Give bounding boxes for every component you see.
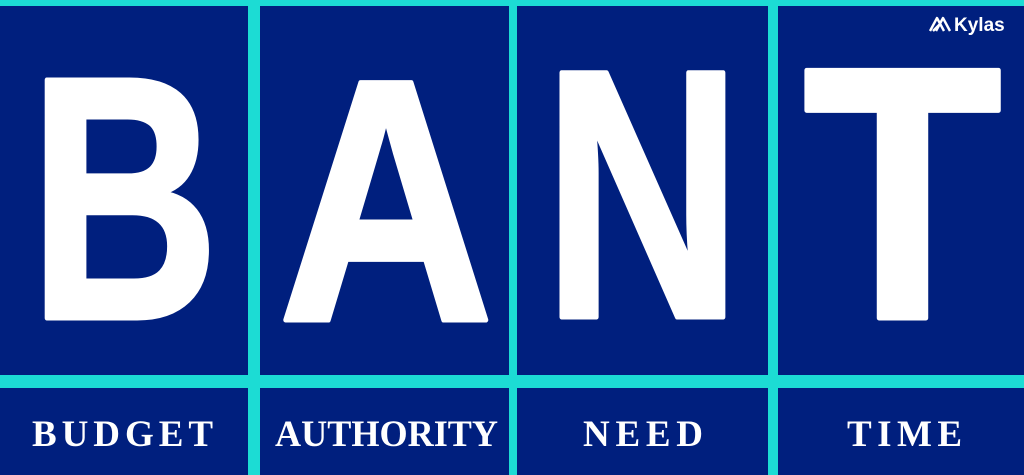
letter A: A: [278, 9, 494, 394]
label: BUDGET: [0, 388, 248, 475]
label: TIME: [778, 388, 1024, 475]
panel: T: [778, 0, 1024, 395]
letter B: B: [29, 6, 219, 392]
label: NEED: [517, 388, 768, 475]
panel: N: [517, 0, 768, 393]
logo: Kylas: Kylas: [954, 15, 1005, 36]
panel: A: [260, 6, 509, 394]
label: AUTHORITY: [260, 388, 509, 475]
label: NEED: NEED: [583, 414, 703, 455]
logo: Kylas: [930, 15, 1005, 36]
label: TIME: TIME: [847, 414, 962, 455]
label: AUTHORITY: AUTHORITY: [275, 414, 498, 455]
letter N: N: [543, 0, 742, 393]
letter T: T: [803, 0, 1002, 395]
panel: B: [0, 6, 248, 392]
label: BUDGET: BUDGET: [32, 414, 213, 455]
